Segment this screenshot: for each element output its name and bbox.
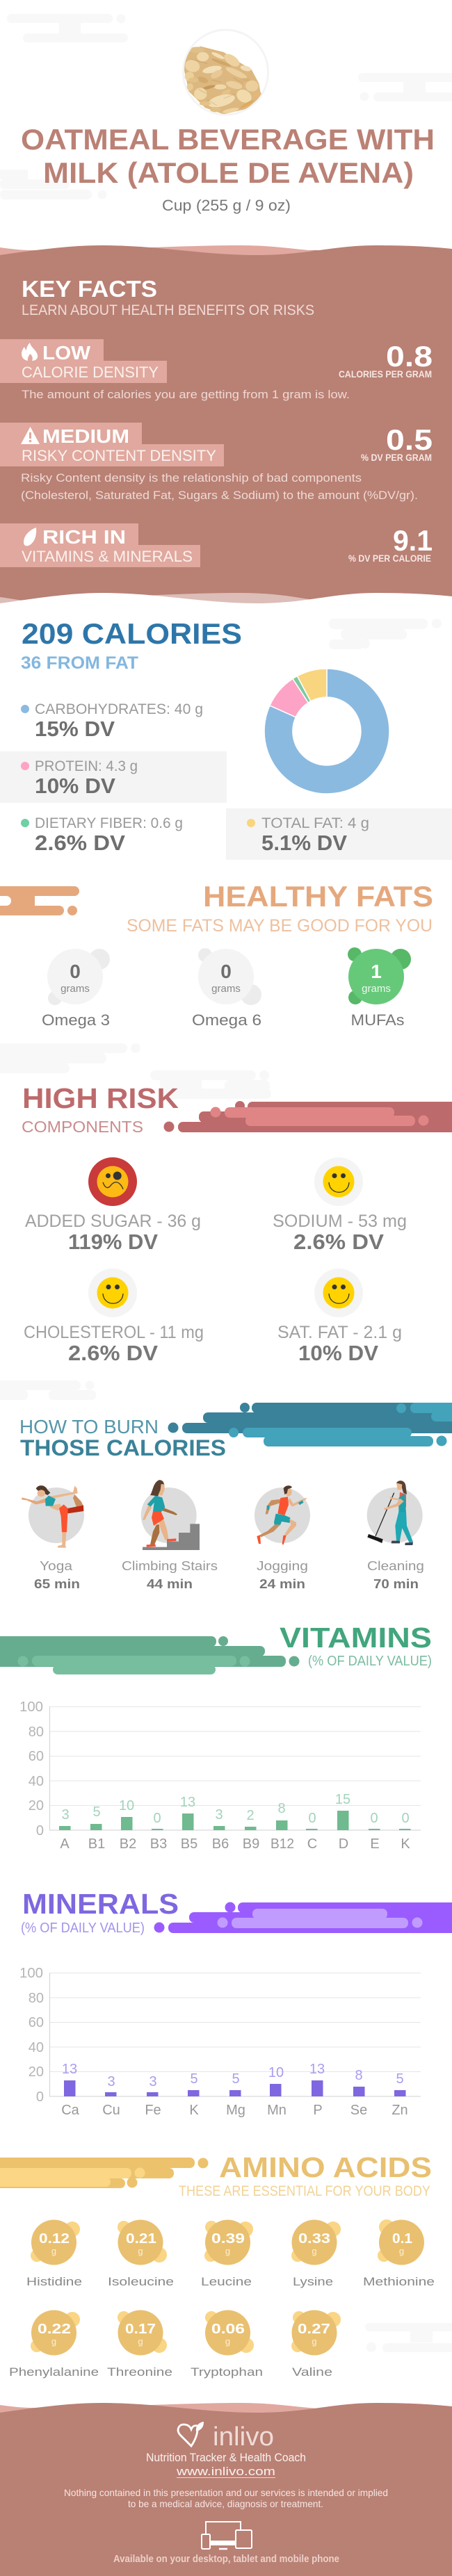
amino: valine: 0.27 <box>298 2322 330 2337</box>
icon: devices <box>202 2522 252 2549</box>
fat: omega 3: grams <box>60 983 90 995</box>
legend: carbohydrates <box>21 701 203 741</box>
calories heading <box>21 617 242 673</box>
legend: dietary fiber <box>21 815 183 855</box>
risky content badge <box>0 423 224 466</box>
risky content value <box>361 423 433 463</box>
amino: lysine: 0.33 <box>298 2231 330 2247</box>
bar chart: vitamins: B3 <box>150 1836 167 1852</box>
legend: dietary fiber: DIETARY FIBER: 0.6 g <box>35 815 183 831</box>
amino: phenylalanine: Phenylalanine <box>9 2365 99 2379</box>
amino: isoleucine: Isoleucine <box>108 2275 174 2288</box>
vitamins badge: RICH IN <box>42 526 126 548</box>
bar chart: minerals: 100 <box>19 1966 43 1981</box>
bar chart: vitamins: 0 <box>370 1811 378 1826</box>
amino: methionine: g <box>399 2246 404 2256</box>
risk: added sugar: 119% DV <box>68 1230 158 1254</box>
icon: warning triangle <box>21 427 40 444</box>
bar chart: vitamins: 0 <box>153 1811 161 1826</box>
icon: leaf <box>24 528 36 546</box>
title <box>21 123 435 189</box>
legend: carbohydrates: CARBOHYDRATES: 40 g <box>35 701 203 717</box>
decoration: healthy fats cloud <box>0 886 79 915</box>
legend: total fat: TOTAL FAT: 4 g <box>261 815 369 831</box>
amino: threonine: g <box>138 2336 143 2347</box>
bar chart: vitamins: B6 <box>212 1836 229 1852</box>
bar chart: minerals: 80 <box>29 1991 44 2006</box>
fat: mufas: MUFAs <box>350 1011 405 1029</box>
bar chart: minerals: K <box>189 2103 199 2118</box>
risk: sodium: 2.6% DV <box>293 1230 384 1254</box>
bar chart: vitamins: B2 <box>120 1836 136 1852</box>
amino: threonine <box>107 2310 172 2379</box>
amino: phenylalanine <box>9 2310 99 2379</box>
risky content note: Risky Content density is the relationship of bad components <box>21 471 362 484</box>
exercise: climbing stairs: Climbing Stairs <box>122 1559 218 1573</box>
heading: vitamins: (% OF DAILY VALUE) <box>308 1654 432 1669</box>
bar chart: minerals: Zn <box>392 2103 408 2118</box>
calorie density note: The amount of calories you are getting from 1 gram is low. <box>22 388 350 401</box>
legend: protein <box>21 758 138 798</box>
decoration: burn calories cloud <box>168 1403 452 1446</box>
vitamins value: 9.1 <box>393 524 433 557</box>
bar chart: vitamins <box>19 1699 421 1852</box>
decoration: minerals cloud <box>154 1902 452 1933</box>
amino: leucine: 0.39 <box>211 2231 245 2247</box>
exercise: cleaning: Cleaning <box>367 1559 424 1573</box>
icon: flame <box>22 343 38 361</box>
bar chart: vitamins: B5 <box>181 1836 197 1852</box>
decoration: high risk cloud <box>164 1101 452 1132</box>
amino: valine <box>291 2310 341 2379</box>
heading: minerals: (% OF DAILY VALUE) <box>21 1921 145 1936</box>
exercise: yoga: 65 min <box>34 1577 80 1591</box>
bar chart: vitamins: 8 <box>277 1801 286 1816</box>
amino: tryptophan <box>191 2310 263 2379</box>
amino: isoleucine <box>108 2220 174 2288</box>
disclaimer <box>64 2487 388 2509</box>
bar chart: minerals: 60 <box>29 2015 44 2030</box>
bar chart: vitamins: 3 <box>215 1807 223 1823</box>
bar chart: vitamins: 60 <box>29 1749 44 1764</box>
bar chart: vitamins: 2 <box>246 1808 255 1823</box>
macro legend rows backgrounds <box>0 751 452 860</box>
vitamins value: % DV PER CALORIE <box>348 553 431 564</box>
risk: saturated fat <box>277 1269 402 1365</box>
bar chart: minerals: 5 <box>396 2071 404 2087</box>
amino: tryptophan: 0.06 <box>211 2322 245 2337</box>
vitamins value <box>348 524 433 564</box>
bar chart: vitamins: 5 <box>92 1804 101 1820</box>
fat: omega 3 <box>42 949 110 1029</box>
heading: vitamins: VITAMINS <box>280 1622 432 1654</box>
exercise: cleaning: 70 min <box>373 1577 419 1591</box>
heading: healthy fats: SOME FATS MAY BE GOOD FOR YOU <box>127 916 433 936</box>
bar chart: minerals: Mg <box>226 2103 245 2118</box>
amino: methionine <box>363 2219 435 2288</box>
availability note: Available on your desktop, tablet and mobile phone <box>113 2553 339 2565</box>
bar chart: vitamins: 0 <box>401 1811 410 1826</box>
bar chart: vitamins: A <box>60 1836 70 1852</box>
bar chart: vitamins: 13 <box>180 1795 195 1810</box>
amino: histidine: Histidine <box>26 2275 82 2288</box>
title: MILK (ATOLE DE AVENA) <box>43 156 414 189</box>
amino: leucine <box>201 2220 253 2288</box>
amino: lysine: Lysine <box>293 2275 333 2288</box>
disclaimer: Nothing contained in this presentation and our services is intended or implied <box>64 2487 388 2498</box>
bar chart: minerals: 20 <box>29 2064 44 2080</box>
vitamins badge <box>0 523 200 567</box>
bar chart: minerals: 3 <box>107 2074 115 2089</box>
decoration: vitamins cloud <box>0 1636 299 1674</box>
disclaimer: to be a medical advice, diagnosis or treatment. <box>128 2498 323 2509</box>
risky content badge: RISKY CONTENT DENSITY <box>22 447 216 464</box>
risk: added sugar <box>25 1157 201 1254</box>
heading: healthy fats <box>127 880 433 936</box>
legend: protein: PROTEIN: 4.3 g <box>35 758 138 774</box>
heading: healthy fats: HEALTHY FATS <box>203 880 433 913</box>
website link: www.inlivo.com <box>176 2465 275 2478</box>
risk: cholesterol: CHOLESTEROL - 11 mg <box>24 1323 204 1342</box>
risk: saturated fat: SAT. FAT - 2.1 g <box>277 1323 402 1342</box>
risk: added sugar: ADDED SUGAR - 36 g <box>25 1212 201 1231</box>
bar chart: minerals: 3 <box>149 2074 157 2089</box>
panel: footer <box>0 2403 452 2576</box>
amino: lysine <box>291 2220 341 2288</box>
exercise: cleaning <box>367 1481 424 1591</box>
calories heading: 209 CALORIES <box>22 617 242 650</box>
bar chart: minerals: 5 <box>232 2071 240 2087</box>
exercise: climbing stairs: 44 min <box>147 1577 193 1591</box>
food photo: oat flakes in circle <box>184 30 268 115</box>
amino: isoleucine: 0.21 <box>126 2231 156 2247</box>
bar chart: minerals: 40 <box>29 2040 44 2055</box>
amino: lysine: g <box>312 2246 317 2256</box>
heading: amino acids <box>179 2151 432 2199</box>
fat: mufas: 1 <box>371 961 382 982</box>
risky content badge: MEDIUM <box>42 425 129 447</box>
key facts subheading: LEARN ABOUT HEALTH BENEFITS OR RISKS <box>22 302 314 318</box>
risk: saturated fat: 10% DV <box>298 1341 378 1365</box>
bar chart: vitamins: 100 <box>19 1699 43 1715</box>
heading: high risk: HIGH RISK <box>22 1082 179 1114</box>
heading: how to burn: HOW TO BURN <box>19 1416 159 1437</box>
bar chart: vitamins: 15 <box>335 1792 350 1807</box>
bar chart: vitamins: B1 <box>88 1836 105 1852</box>
tagline: Nutrition Tracker & Health Coach <box>146 2451 306 2464</box>
legend: carbohydrates: 15% DV <box>35 717 115 741</box>
exercise: jogging <box>255 1485 310 1591</box>
calorie density value: 0.8 <box>386 340 433 373</box>
amino: histidine: 0.12 <box>39 2231 70 2247</box>
heading: vitamins <box>280 1622 432 1669</box>
bar chart: vitamins: 40 <box>29 1774 44 1789</box>
amino: isoleucine: g <box>138 2246 143 2256</box>
bar chart: minerals: Fe <box>145 2103 161 2118</box>
bar chart: minerals: P <box>313 2103 323 2118</box>
bar chart: minerals: 13 <box>309 2062 325 2077</box>
heading: amino acids: AMINO ACIDS <box>219 2151 432 2183</box>
fat: omega 6: Omega 6 <box>192 1011 261 1029</box>
donut chart <box>264 669 389 794</box>
bar chart: vitamins: K <box>401 1836 410 1852</box>
amino: valine: Valine <box>292 2365 332 2379</box>
decoration: amino acids cloud <box>0 2158 209 2188</box>
risk: cholesterol <box>24 1269 204 1365</box>
fat: omega 6: grams <box>211 983 241 995</box>
risk: sodium: SODIUM - 53 mg <box>273 1212 407 1231</box>
fat: omega 6 <box>192 948 261 1029</box>
amino: methionine: 0.1 <box>392 2231 412 2247</box>
bar chart: minerals: 8 <box>355 2068 363 2083</box>
fat: omega 6: 0 <box>220 961 232 982</box>
bar chart: vitamins: E <box>370 1836 380 1852</box>
bar chart: minerals: Cu <box>102 2103 120 2118</box>
risky content value: 0.5 <box>386 423 433 456</box>
fat: omega 3: 0 <box>70 961 81 982</box>
serving size: Cup (255 g / 9 oz) <box>162 197 291 214</box>
bar chart: vitamins: 20 <box>29 1798 44 1813</box>
bar chart: minerals: 13 <box>62 2062 77 2077</box>
heading: high risk: COMPONENTS <box>22 1118 143 1136</box>
fat: mufas: grams <box>362 983 391 995</box>
title: OATMEAL BEVERAGE WITH <box>21 123 435 156</box>
heading: how to burn: THOSE CALORIES <box>20 1435 226 1460</box>
amino: phenylalanine: g <box>51 2336 56 2347</box>
bar chart: vitamins: C <box>307 1836 317 1852</box>
heading: high risk <box>22 1082 179 1136</box>
risky content note <box>21 471 418 502</box>
bar chart: vitamins: B12 <box>271 1836 294 1852</box>
risky content value: % DV PER GRAM <box>361 453 432 463</box>
bar chart: minerals: 10 <box>268 2065 284 2080</box>
calorie density value: CALORIES PER GRAM <box>339 369 432 380</box>
amino: threonine: Threonine <box>107 2365 172 2379</box>
amino: tryptophan: g <box>225 2336 230 2347</box>
bar chart: vitamins: D <box>339 1836 348 1852</box>
amino: leucine: g <box>225 2246 230 2256</box>
bar chart: vitamins: 80 <box>29 1725 44 1740</box>
fat: omega 3: Omega 3 <box>42 1011 110 1029</box>
bar chart: minerals: Ca <box>61 2103 80 2118</box>
vitamins badge: VITAMINS & MINERALS <box>22 548 193 565</box>
amino: methionine: Methionine <box>363 2275 435 2288</box>
calorie density badge: LOW <box>42 342 91 364</box>
bar chart: vitamins: 0 <box>308 1811 316 1826</box>
amino: histidine <box>26 2220 82 2288</box>
bar chart: vitamins: 3 <box>61 1807 70 1823</box>
risk: cholesterol: 2.6% DV <box>68 1341 158 1365</box>
key facts heading: KEY FACTS <box>22 276 157 302</box>
calorie density badge: CALORIE DENSITY <box>22 364 159 381</box>
heading: minerals: MINERALS <box>22 1888 179 1920</box>
bar chart: minerals: 5 <box>190 2071 198 2087</box>
amino: valine: g <box>312 2336 317 2347</box>
bar chart: vitamins: B9 <box>243 1836 259 1852</box>
heading: how to burn <box>19 1416 226 1460</box>
exercise: yoga: Yoga <box>40 1559 73 1573</box>
amino: tryptophan: Tryptophan <box>191 2365 263 2379</box>
amino: histidine: g <box>51 2246 56 2256</box>
calories heading: 36 FROM FAT <box>21 653 138 673</box>
risky content note: (Cholesterol, Saturated Fat, Sugars & Sodium) to the amount (%DV/gr). <box>21 489 418 502</box>
bar chart: minerals: Mn <box>267 2103 286 2118</box>
legend: dietary fiber: 2.6% DV <box>35 831 125 855</box>
exercise: yoga <box>22 1485 84 1591</box>
exercise: jogging: Jogging <box>257 1559 308 1573</box>
amino: leucine: Leucine <box>201 2275 252 2288</box>
logo wordmark: inlivo <box>213 2422 274 2452</box>
legend: total fat <box>247 815 369 855</box>
bar chart: minerals <box>19 1966 421 2118</box>
amino: threonine: 0.17 <box>125 2322 156 2337</box>
legend: protein: 10% DV <box>35 774 115 798</box>
bar chart: minerals: Se <box>350 2103 367 2118</box>
exercise: jogging: 24 min <box>259 1577 305 1591</box>
legend: total fat: 5.1% DV <box>261 831 347 855</box>
risk: sodium <box>273 1157 407 1254</box>
amino: phenylalanine: 0.22 <box>38 2322 71 2337</box>
bar chart: vitamins: 0 <box>36 1823 44 1839</box>
panel: key facts <box>0 245 452 612</box>
calorie density badge <box>0 339 167 383</box>
bar chart: vitamins: 10 <box>119 1798 134 1813</box>
calorie density value <box>339 340 433 380</box>
exercise: climbing stairs <box>122 1480 218 1591</box>
fat: mufas <box>348 947 411 1029</box>
heading: minerals <box>21 1888 179 1936</box>
bar chart: minerals: 0 <box>36 2089 44 2105</box>
logo icon: heart and leaf <box>178 2422 204 2446</box>
